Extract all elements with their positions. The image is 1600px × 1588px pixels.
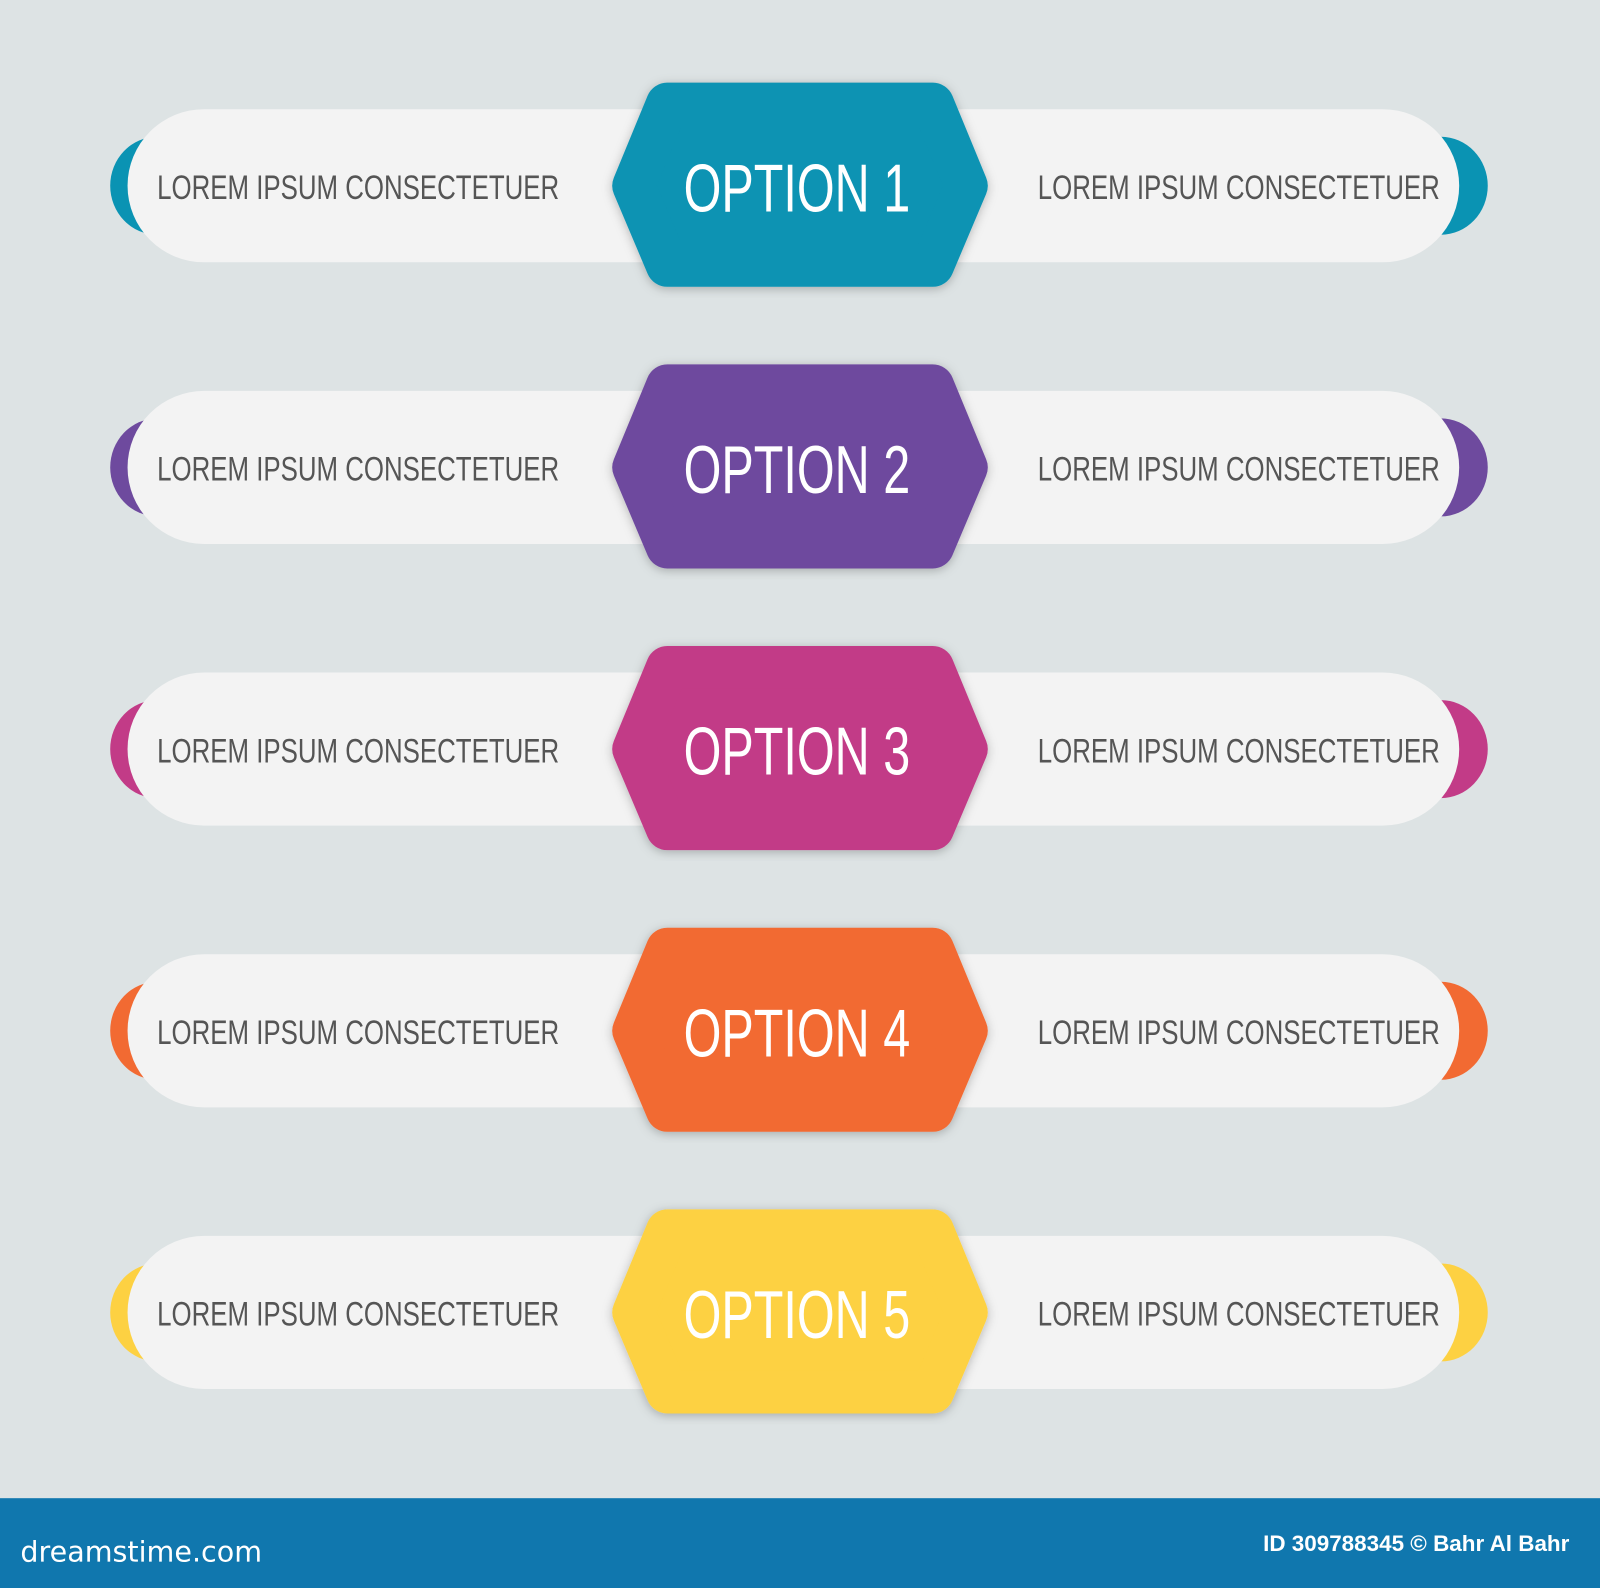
row 5	[110, 1231, 1488, 1392]
right text: LOREM IPSUM CONSECTETUER	[1038, 1296, 1440, 1334]
hexagon badge: option 1: OPTION 1	[684, 151, 910, 226]
pill bar	[128, 954, 1459, 1107]
right text: LOREM IPSUM CONSECTETUER	[1038, 732, 1440, 770]
left text: LOREM IPSUM CONSECTETUER	[157, 1296, 559, 1334]
hexagon badge: option 3: OPTION 3	[684, 715, 910, 790]
hexagon badge: option 4: OPTION 4	[684, 996, 910, 1071]
hexagon badge: option 3	[634, 667, 966, 829]
right text: LOREM IPSUM CONSECTETUER	[1038, 451, 1440, 489]
right text: LOREM IPSUM CONSECTETUER	[1038, 1014, 1440, 1052]
left text: LOREM IPSUM CONSECTETUER	[157, 451, 559, 489]
left text: LOREM IPSUM CONSECTETUER	[157, 732, 559, 770]
left accent arc	[110, 700, 204, 798]
pill bar	[128, 391, 1459, 544]
right accent arc	[1394, 982, 1488, 1080]
pill bar	[128, 673, 1459, 826]
right accent arc	[1394, 137, 1488, 235]
row 4	[110, 949, 1488, 1110]
right accent arc	[1394, 700, 1488, 798]
footer bar	[0, 1498, 1600, 1588]
hexagon badge: option 2: OPTION 2	[684, 433, 910, 508]
left text: LOREM IPSUM CONSECTETUER	[157, 1014, 559, 1052]
right accent arc	[1394, 1263, 1488, 1361]
row 3	[110, 667, 1488, 829]
hexagon badge: option 1	[634, 104, 966, 265]
row 2	[110, 386, 1488, 547]
hexagon badge: option 5	[634, 1231, 966, 1392]
footer credit: ID 309788345 © Bahr Al Bahr	[1263, 1531, 1570, 1556]
pill bar	[128, 109, 1459, 262]
hexagon badge: option 2	[634, 386, 966, 547]
left accent arc	[110, 137, 204, 235]
footer logo text: dreamstime.com	[20, 1534, 262, 1568]
right accent arc	[1394, 418, 1488, 516]
pill bar	[128, 1236, 1459, 1389]
left text: LOREM IPSUM CONSECTETUER	[157, 169, 559, 207]
left accent arc	[110, 1263, 204, 1361]
hexagon badge: option 5: OPTION 5	[684, 1278, 910, 1353]
left accent arc	[110, 982, 204, 1080]
right text: LOREM IPSUM CONSECTETUER	[1038, 169, 1440, 207]
row 1	[110, 104, 1488, 265]
hexagon badge: option 4	[634, 949, 966, 1110]
left accent arc	[110, 418, 204, 516]
